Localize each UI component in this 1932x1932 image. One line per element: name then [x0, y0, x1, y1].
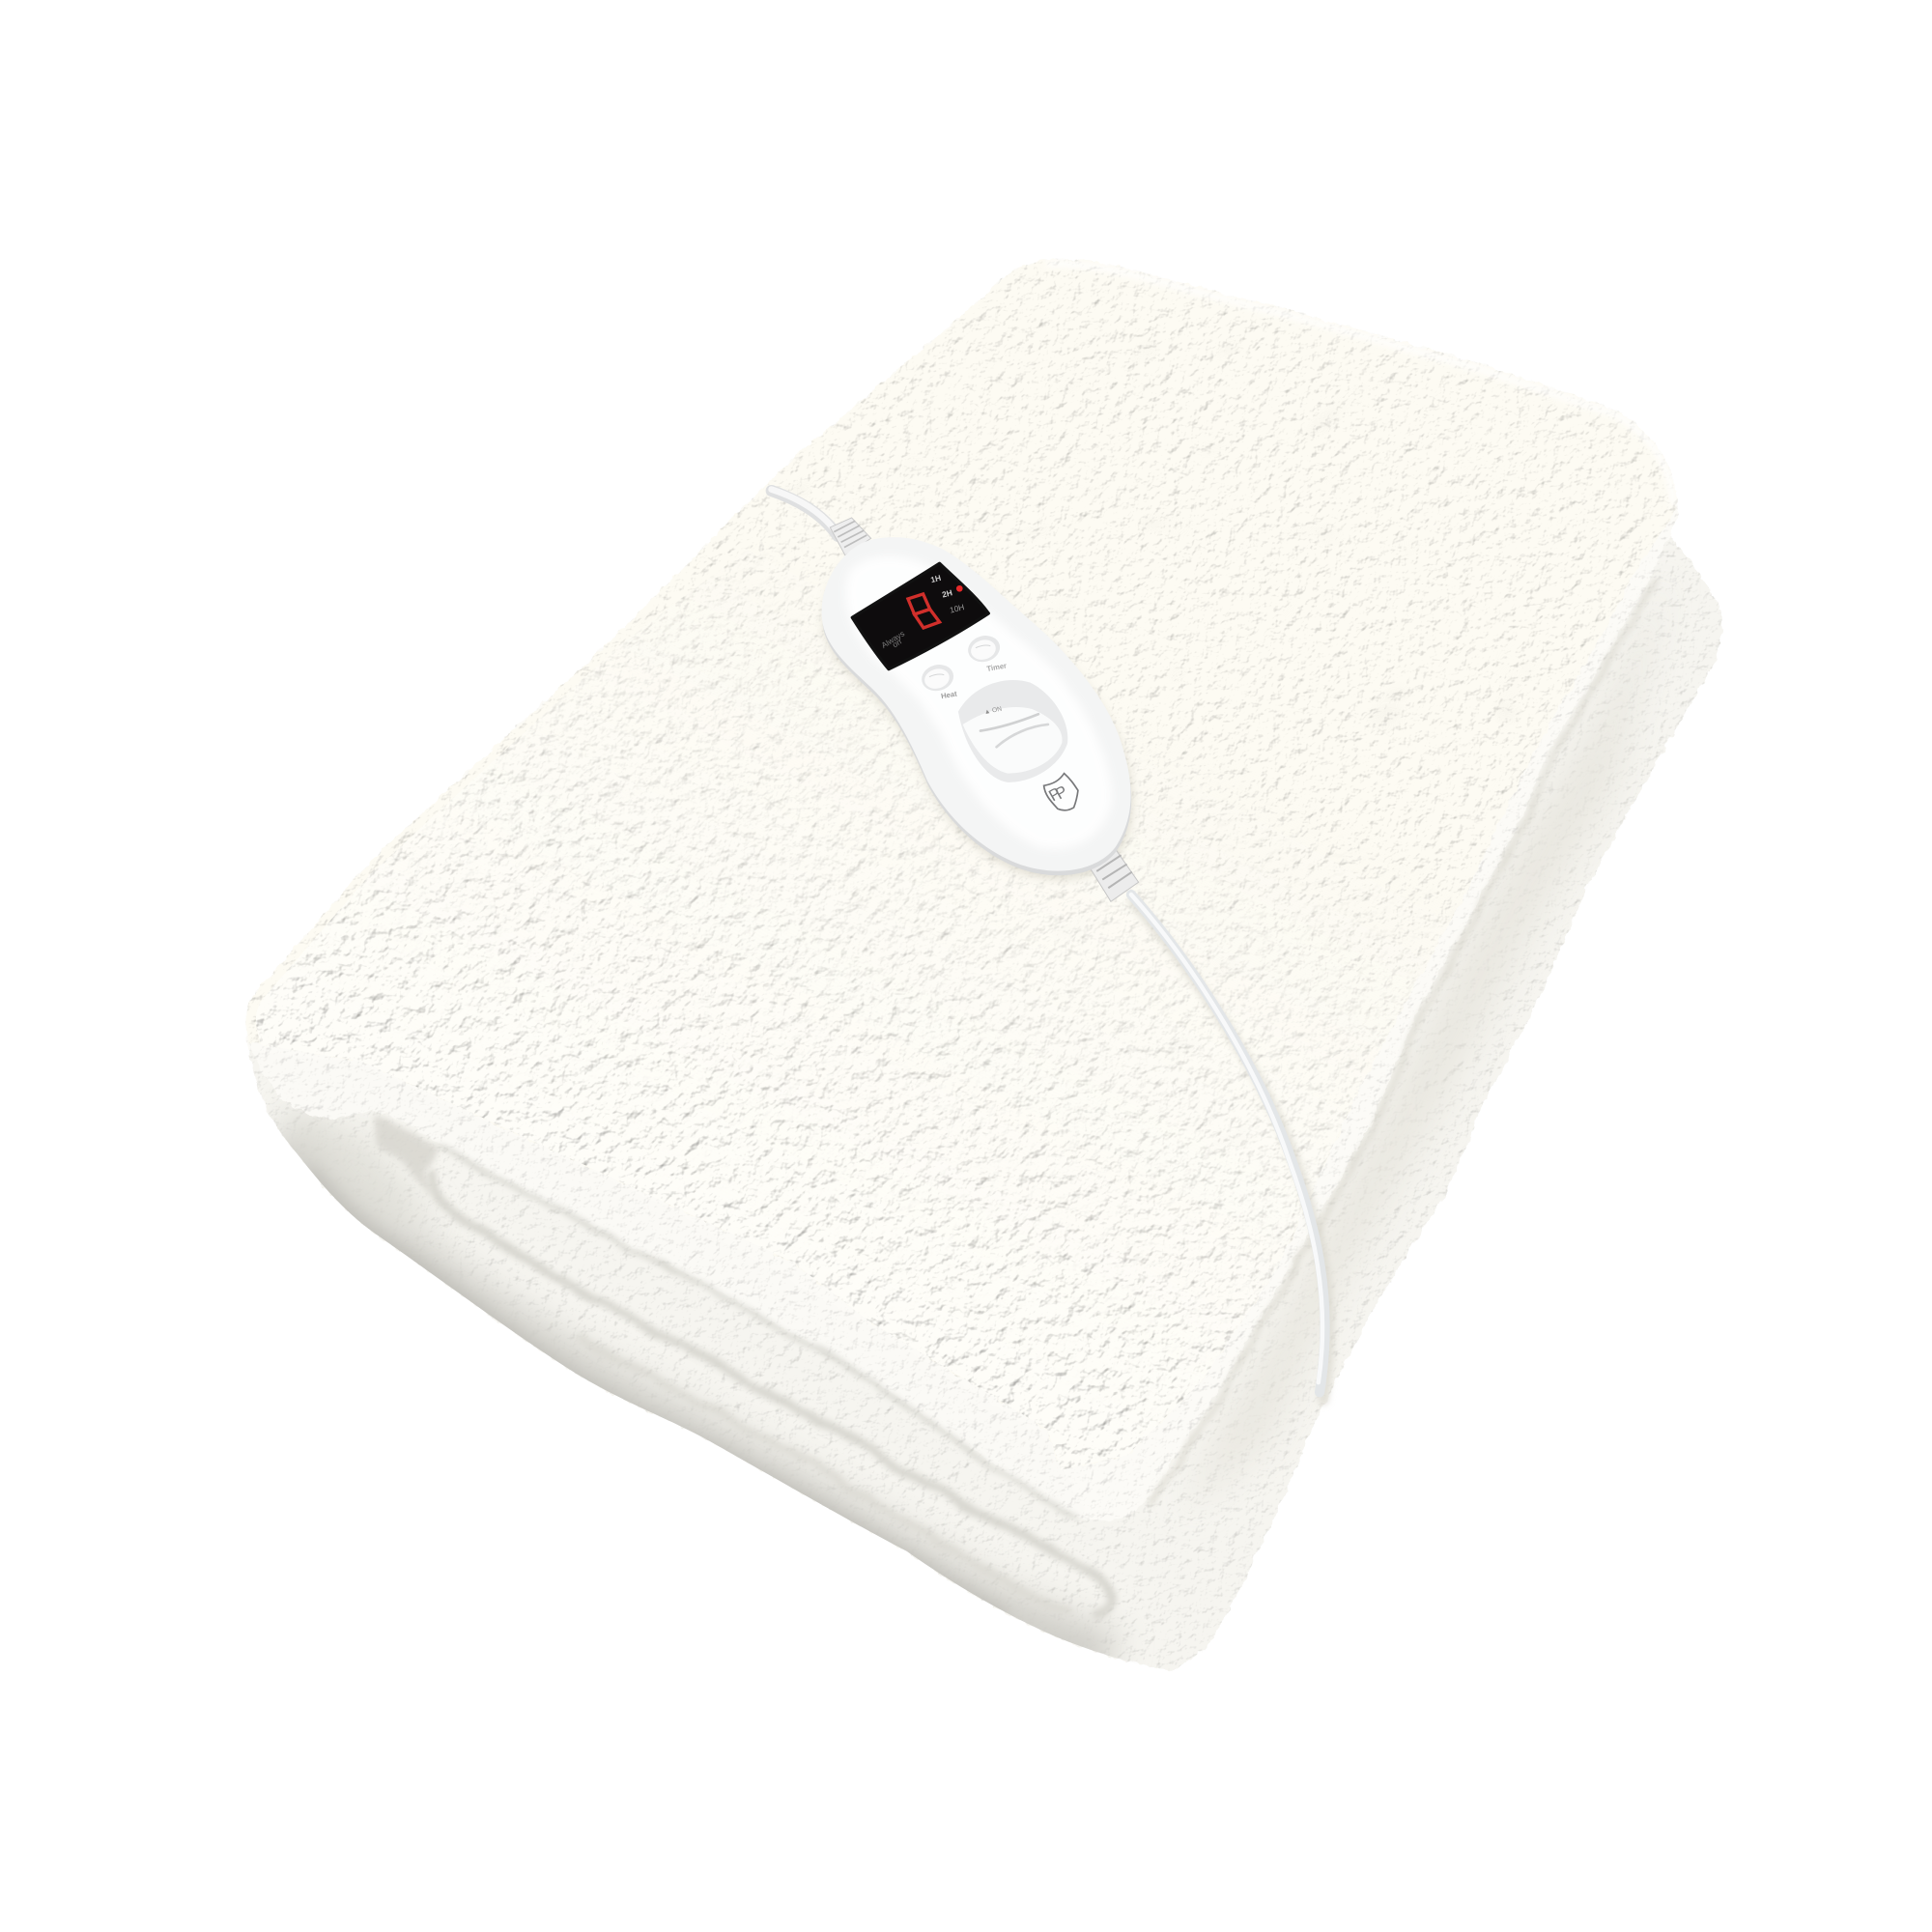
top strain relief [830, 518, 871, 555]
controller body [822, 537, 1131, 871]
heat button [919, 661, 956, 695]
cable to blanket [1131, 895, 1325, 1392]
bottom strain relief [1078, 834, 1139, 901]
slider recess [958, 680, 1067, 782]
product illustration: folded blanket with controller [245, 259, 1723, 1671]
display screen: 10H [949, 602, 965, 615]
folded blanket [245, 260, 1722, 1671]
brand logo shield [1044, 774, 1078, 810]
fold cavity shadow [373, 1117, 439, 1198]
brand logo shield: P [1045, 783, 1065, 805]
cable highlight [1131, 895, 1322, 1382]
top panel thickness band [245, 260, 1677, 1521]
indicator light [956, 585, 963, 592]
lower blanket layer [249, 265, 1722, 1671]
display screen [852, 563, 988, 669]
fold band under the top panel [249, 1045, 1099, 1520]
body highlight [845, 556, 1113, 849]
layer ridge crease shadows [434, 1173, 1111, 1614]
top panel rim highlight [1047, 264, 1673, 505]
controller body rim [822, 542, 1131, 875]
display labels: Always [879, 629, 906, 650]
hand controller [772, 490, 1139, 901]
wide underside shading [277, 1140, 1109, 1663]
top blanket fleece panel [245, 260, 1676, 1470]
cable shadow [1133, 902, 1329, 1400]
slider knob: ▲ ON [983, 706, 1003, 716]
left roll shading [315, 1120, 421, 1213]
crease along the right edge of the top panel [1150, 579, 1658, 1504]
slider knob [963, 706, 1063, 774]
front fold shading [277, 567, 1672, 1663]
timer button [965, 632, 1003, 666]
display screen: 1H [929, 573, 942, 584]
stronger curls at the front of the panel [256, 518, 1540, 1470]
brand logo shield: P [1052, 781, 1070, 803]
display digit [908, 594, 940, 628]
display screen: on [891, 637, 903, 649]
hand controller: Timer [986, 661, 1008, 673]
underside edge shadow [308, 1171, 1005, 1620]
controller shadow [824, 546, 1133, 879]
crease under the band [439, 1146, 1077, 1518]
power cable [1131, 895, 1329, 1400]
right outer layer shading [1211, 672, 1636, 1474]
display screen: 2H [941, 587, 953, 600]
top cable [772, 491, 838, 536]
button labels: Heat [940, 689, 958, 700]
